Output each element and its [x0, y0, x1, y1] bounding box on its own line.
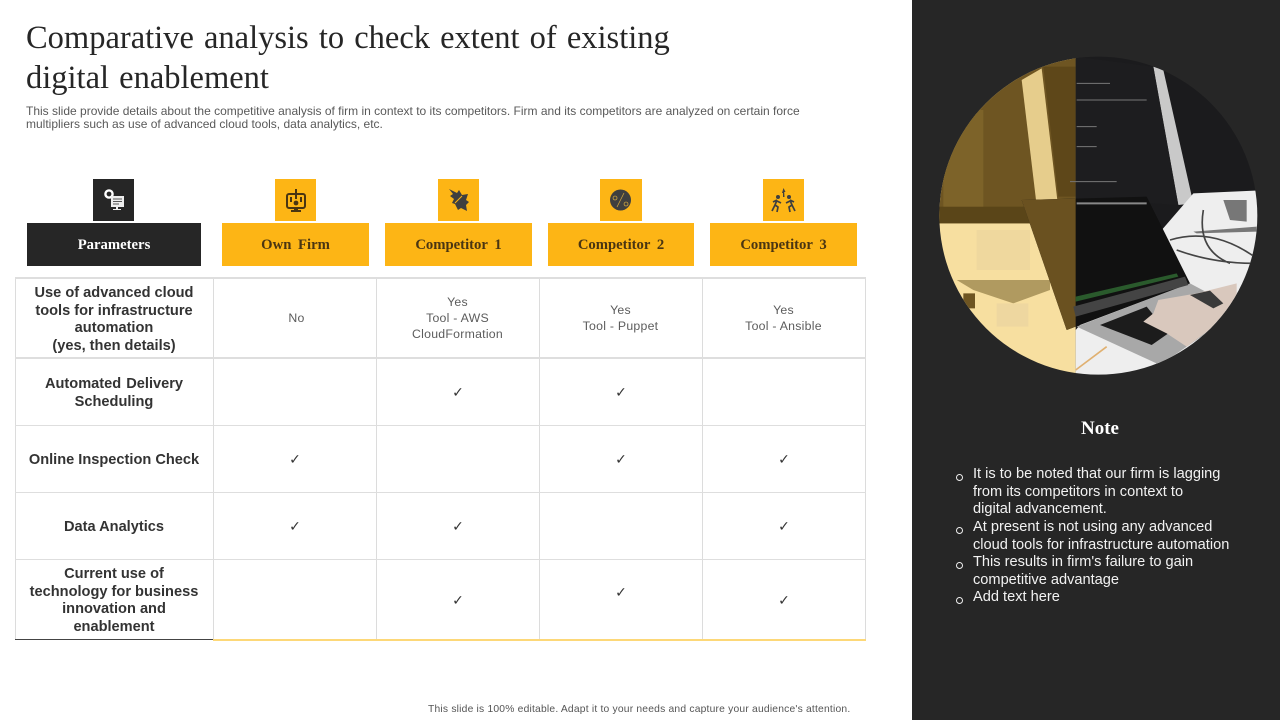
cell: competitor 1 cloud tools: [412, 295, 503, 341]
row label: automated delivery scheduling: [45, 376, 183, 410]
check mark: delivery scheduling competitor 1: ✓: [452, 385, 464, 401]
cell: competitor 1 cloud tools: Yes: [447, 295, 468, 309]
note bullet list: Add text here: [973, 589, 1060, 605]
check mark: inspection competitor 2: ✓: [615, 452, 627, 468]
note bullet list: This results in firm's failure to gain: [973, 554, 1193, 570]
check mark: inspection competitor 3: ✓: [778, 452, 790, 468]
check mark: analytics own firm: ✓: [289, 519, 301, 535]
note bullet list: [956, 466, 1229, 605]
title: [26, 20, 670, 96]
row label: advanced cloud tools: [35, 285, 193, 354]
header: Own Firm: Own Firm: [261, 237, 330, 253]
row label: online inspection check: Online Inspection Check: [29, 452, 199, 468]
cell: own firm cloud tools: No: [288, 311, 305, 325]
header: Competitor 3: [710, 223, 857, 266]
header: Own Firm: [222, 223, 369, 266]
row label: current use of technology: enablement: [73, 619, 155, 635]
cell: competitor 2 cloud tools: [582, 303, 658, 333]
panel: dark sidebar: [912, 0, 1280, 720]
note bullet list: competitive advantage: [973, 572, 1119, 588]
cell: competitor 2 cloud tools: Tool - Puppet: [583, 319, 658, 333]
note bullet list: digital advancement.: [973, 501, 1107, 517]
check mark: analytics competitor 1: ✓: [452, 519, 464, 535]
subtitle text: [26, 104, 800, 131]
header: Parameters: Parameters: [78, 237, 150, 253]
cell: competitor 3 cloud tools: Yes: [773, 303, 794, 317]
check mark: inspection own firm: ✓: [289, 452, 301, 468]
subtitle text: This slide provide details about the competitive analysis of firm in context to its competitors. Firm and its competitors are analyzed on certain force: [26, 104, 800, 118]
check mark: analytics competitor 3: ✓: [778, 519, 790, 535]
row label: current use of technology: Current use of: [64, 566, 164, 582]
note bullet list: cloud tools for infrastructure automation: [973, 536, 1229, 552]
icon: competitor 2 percent circle: [600, 179, 642, 221]
row label: advanced cloud tools: Use of advanced cloud: [35, 285, 193, 301]
comparison table: [15, 277, 866, 641]
row label: advanced cloud tools: tools for infrastructure: [35, 303, 193, 319]
icon: competitor 3 running figures: [763, 179, 804, 221]
row label: automated delivery scheduling: Scheduling: [75, 394, 153, 410]
row label: current use of technology: innovation and: [62, 601, 166, 617]
icon: parameters gear and monitor: [93, 179, 134, 221]
header: Competitor 1: [385, 223, 532, 266]
row label: automated delivery scheduling: Automated Delivery: [45, 376, 183, 392]
header: Competitor 2: Competitor 2: [578, 237, 664, 253]
icon: competitor 1 leaf burst: [438, 179, 479, 221]
cell: competitor 3 cloud tools: Tool - Ansible: [745, 319, 822, 333]
title: digital enablement: [26, 60, 269, 96]
check mark: technology competitor 1: ✓: [452, 593, 464, 609]
subtitle text: multipliers such as use of advanced cloud tools, data analytics, etc.: [26, 117, 383, 131]
check mark: technology competitor 2: ✓: [615, 585, 627, 601]
row label: advanced cloud tools: automation: [75, 320, 153, 336]
note bullet list: from its competitors in context to: [973, 484, 1183, 500]
header: Competitor 1: Competitor 1: [415, 237, 502, 253]
title: Comparative analysis to check extent of existing: [26, 20, 670, 56]
header: Competitor 2: [548, 223, 694, 266]
cell: competitor 2 cloud tools: Yes: [610, 303, 631, 317]
check mark: delivery scheduling competitor 2: ✓: [615, 385, 627, 401]
cell: competitor 1 cloud tools: CloudFormation: [412, 327, 503, 341]
cell: competitor 1 cloud tools: Tool - AWS: [426, 311, 489, 325]
header: Parameters: [27, 223, 201, 266]
row label: current use of technology: [30, 566, 198, 635]
row label: advanced cloud tools: (yes, then details): [52, 338, 176, 354]
cell: competitor 3 cloud tools: [745, 303, 822, 333]
note bullet list: At present is not using any advanced: [973, 519, 1212, 535]
photo: laptop and monitor circle: [939, 56, 1258, 375]
note heading: Note: [1081, 418, 1119, 439]
footer note: This slide is 100% editable. Adapt it to your needs and capture your audience's attention.: [428, 704, 850, 715]
check mark: technology competitor 3: ✓: [778, 593, 790, 609]
note bullet list: It is to be noted that our firm is lagging: [973, 466, 1220, 482]
row label: data analytics: Data Analytics: [64, 519, 164, 535]
header: Competitor 3: Competitor 3: [740, 237, 827, 253]
icon: own firm monitor: [275, 179, 316, 221]
row label: current use of technology: technology for business: [30, 584, 198, 600]
